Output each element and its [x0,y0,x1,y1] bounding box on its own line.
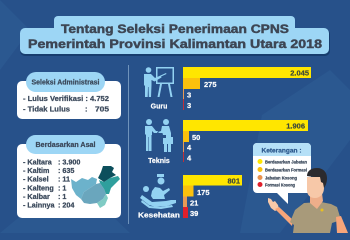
figure: officer pointing [268,168,348,233]
bar: teknis berdasarkan formasi: 50 [192,133,200,142]
label: kesehatan: Kesehatan [138,210,180,220]
heading: berdasarkan asal: Berdasarkan Asal [36,142,96,149]
list: asal pelamar: - Kaltara [23,158,53,166]
text: tidak lulus: 705 [95,104,109,114]
panel: seleksi administrasi [17,72,121,119]
bar: guru berdasarkan formasi: 275 [204,80,217,89]
list: asal pelamar: - Kalteng [23,184,54,192]
chart: teknis [145,119,308,165]
label: teknis: Teknis [148,158,170,165]
list: asal pelamar [23,158,80,210]
title [20,16,330,56]
text: tidak lulus: - Tidak Lulus [23,104,70,114]
callout: keterangan [253,143,311,204]
legend: jabatan kosong: Jabatan Kosong [265,175,297,180]
title: Tentang Seleksi Penerimaan CPNS [61,22,289,36]
list: asal pelamar: - Kaltim [23,166,49,175]
icon: teknis [145,119,173,152]
bar: teknis berdasarkan jabatan [183,120,308,131]
bar: teknis berdasarkan formasi [183,131,200,142]
bar: guru berdasarkan jabatan: 2.045 [290,68,309,78]
text: tidak lulus [23,104,109,114]
icon: kesehatan [140,174,176,209]
list: asal pelamar: : 11 [58,174,70,184]
icon: guru [144,67,174,97]
bar: guru formasi kosong: 3 [187,101,191,110]
bar: guru berdasarkan jabatan [183,67,311,78]
legend: berdasarkan formasi: Berdasarkan Formasi [265,167,307,172]
list: asal pelamar: : 635 [58,166,74,175]
bar: teknis formasi kosong [183,152,192,162]
list: asal pelamar: - Kalbar [23,192,50,201]
bar: teknis formasi kosong: 4 [187,154,192,162]
bar: teknis berdasarkan jabatan: 1.906 [286,122,305,130]
list: asal pelamar: : 3.900 [58,158,80,166]
legend: berdasarkan jabatan: Berdasarkan Jabatan [265,159,307,164]
label: guru: Guru [151,104,167,110]
list: asal pelamar: : 1 [58,184,66,192]
bar: kesehatan berdasarkan jabatan: 801 [227,176,240,186]
list: asal pelamar: - Kalsel [23,174,49,184]
panel: berdasarkan asal [17,135,121,218]
legend: formasi kosong: Formasi Kosong [265,182,295,187]
bar: teknis jabatan kosong: 4 [187,143,192,152]
bar: guru jabatan kosong [183,89,191,100]
divider [128,65,129,224]
list: asal pelamar: : 1 [58,192,66,201]
chart: guru [144,67,311,110]
bar: guru berdasarkan formasi [183,78,217,89]
chart: kesehatan [138,174,242,220]
list: asal pelamar: : 204 [58,200,74,210]
title: Pemerintah Provinsi Kalimantan Utara 2018 [28,37,322,51]
bar: kesehatan jabatan kosong: 21 [190,198,198,208]
bar: guru jabatan kosong: 3 [187,90,191,100]
bar: teknis jabatan kosong [183,142,192,152]
text: lulus verifikasi: - Lulus Verifikasi : 4.752 [23,94,109,103]
text: tidak lulus: : [85,104,87,114]
map: kalimantan [71,166,120,208]
bar: kesehatan formasi kosong: 39 [190,209,198,218]
bar: guru formasi kosong [183,99,191,110]
bar: kesehatan berdasarkan formasi: 175 [197,188,210,197]
list: asal pelamar: - Lainnya [23,200,56,210]
heading: seleksi administrasi: Seleksi Administrasi [32,80,100,86]
heading: keterangan: Keterangan : [262,148,302,154]
